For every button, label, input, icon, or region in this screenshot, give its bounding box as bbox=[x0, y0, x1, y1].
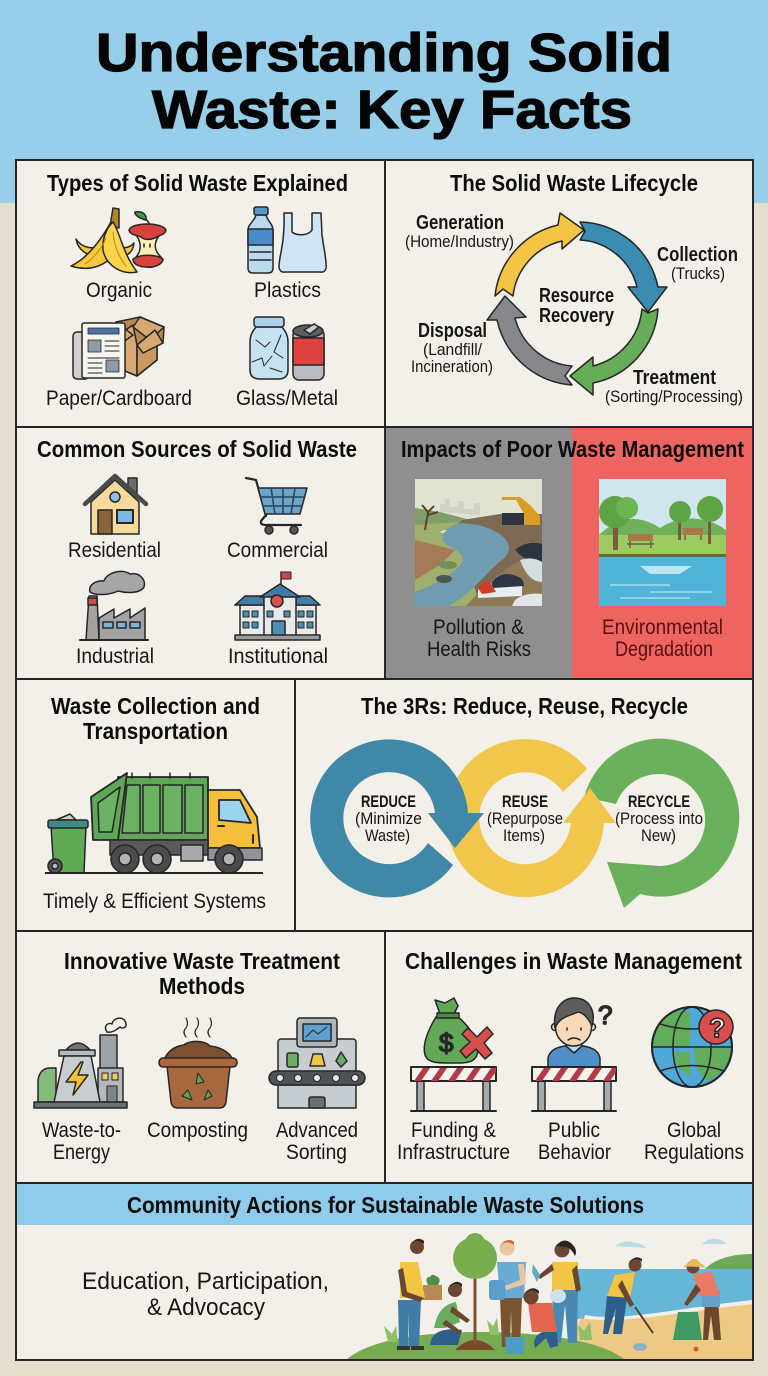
label: environmental degradation: Degradation bbox=[615, 638, 713, 661]
icon: confused person: ? bbox=[598, 1000, 612, 1030]
label: public behavior bbox=[538, 1119, 611, 1164]
heading: challenges: Challenges in Waste Management bbox=[405, 948, 742, 974]
icon: newspaper bbox=[73, 323, 125, 379]
illustration: clean park and lake bbox=[599, 479, 726, 606]
heading: collection bbox=[51, 693, 260, 744]
heading: collection: Transportation bbox=[83, 718, 228, 744]
arrow: disposal to generation bbox=[487, 296, 572, 385]
icon: confused person bbox=[548, 998, 612, 1067]
arrow: reduce ring bbox=[310, 739, 484, 897]
label: reduce: REDUCE bbox=[361, 793, 416, 811]
label: residential: Residential bbox=[68, 539, 161, 562]
text: education participation advocacy bbox=[82, 1268, 329, 1321]
heading: types: Types of Solid Waste Explained bbox=[47, 170, 348, 196]
label: collection: (Trucks) bbox=[671, 264, 725, 283]
label: pollution and health risks: Pollution & bbox=[433, 616, 524, 639]
label: advanced sorting: Sorting bbox=[286, 1141, 347, 1164]
label: disposal bbox=[411, 320, 493, 376]
panel: challenges bbox=[385, 931, 753, 1183]
label: advanced sorting bbox=[276, 1119, 358, 1164]
title: Waste: Key Facts bbox=[152, 80, 632, 140]
label: reuse: REUSE bbox=[502, 793, 548, 811]
label: recycle: (Process into bbox=[615, 809, 703, 828]
label: resource recovery: Resource bbox=[539, 285, 614, 307]
illustration: polluted river bbox=[415, 479, 542, 606]
label: environmental degradation: Environmental bbox=[602, 616, 723, 639]
label: organic: Organic bbox=[86, 279, 152, 302]
icon: money bag with cross bbox=[424, 998, 493, 1063]
label: treatment bbox=[605, 367, 743, 406]
label: plastics: Plastics bbox=[254, 279, 321, 302]
panel: innovative treatment bbox=[16, 931, 385, 1183]
label: global regulations: Regulations bbox=[644, 1141, 744, 1164]
background: sky band bbox=[0, 0, 768, 203]
label: paper/cardboard: Paper/Cardboard bbox=[46, 387, 192, 410]
icon: cardboard box bbox=[116, 317, 164, 376]
label: generation bbox=[405, 212, 514, 251]
label: collection: Collection bbox=[657, 244, 738, 266]
label: recycle: RECYCLE bbox=[628, 793, 690, 811]
label: generation: (Home/Industry) bbox=[405, 232, 514, 251]
icon: school building bbox=[235, 572, 320, 640]
label: waste to energy: Energy bbox=[53, 1141, 110, 1164]
label: waste to energy: Waste-to- bbox=[42, 1119, 121, 1142]
label: disposal: (Landfill/ bbox=[423, 340, 482, 359]
icon: garbage truck bbox=[91, 773, 262, 873]
icon: globe with question badge bbox=[652, 1007, 733, 1087]
icon: factory bbox=[80, 571, 148, 640]
arrow: reuse ring bbox=[446, 739, 616, 897]
label: global regulations: Global bbox=[667, 1119, 721, 1142]
label: pollution and health risks: Health Risks bbox=[427, 638, 531, 661]
label: reuse: Items) bbox=[503, 826, 545, 845]
heading: treatment methods: Innovative Waste Treatment bbox=[64, 948, 340, 974]
heading: lifecycle: The Solid Waste Lifecycle bbox=[450, 170, 698, 196]
arrow: recycle ring bbox=[584, 739, 739, 908]
label: composting: Composting bbox=[147, 1119, 248, 1142]
text: education participation advocacy: & Advocacy bbox=[147, 1294, 265, 1321]
arrow: treatment to disposal bbox=[570, 309, 658, 395]
heading: community actions: Community Actions for Sustainable Waste Solutions bbox=[127, 1192, 644, 1218]
label: funding and infrastructure: Infrastructure bbox=[397, 1141, 510, 1164]
title: Understanding Solid bbox=[96, 23, 672, 83]
icon: cracked glass jar bbox=[250, 317, 288, 379]
label: advanced sorting: Advanced bbox=[276, 1119, 358, 1142]
label: reduce bbox=[355, 793, 422, 845]
icon: shopping cart bbox=[246, 478, 307, 534]
panel: community actions bbox=[16, 1183, 753, 1360]
ground line bbox=[45, 872, 263, 874]
icon: wheelie bin bbox=[48, 814, 88, 873]
label: global regulations bbox=[644, 1119, 744, 1164]
label: recycle bbox=[615, 793, 703, 845]
title bbox=[96, 23, 672, 140]
heading: treatment methods: Methods bbox=[159, 973, 245, 999]
label: glass/metal: Glass/Metal bbox=[236, 387, 338, 410]
label: resource recovery: Recovery bbox=[539, 305, 615, 327]
icon: globe with question badge: ? bbox=[709, 1013, 726, 1043]
arrow: generation to collection bbox=[495, 213, 584, 296]
label: reduce: (Minimize bbox=[355, 809, 422, 828]
text: education participation advocacy: Education, Participation, bbox=[82, 1268, 329, 1295]
label: disposal: Incineration) bbox=[411, 357, 493, 376]
heading: sources: Common Sources of Solid Waste bbox=[37, 436, 357, 462]
label: environmental degradation bbox=[602, 616, 723, 661]
label: public behavior: Behavior bbox=[538, 1141, 611, 1164]
panel: lifecycle bbox=[385, 160, 753, 427]
icon: plastic bottle bbox=[248, 207, 273, 273]
icon: barrier two bbox=[532, 1067, 616, 1111]
label: timely and efficient: Timely & Efficient Systems bbox=[43, 890, 266, 913]
illustration: community cleanup bbox=[347, 1233, 752, 1359]
panel: types of solid waste bbox=[16, 160, 385, 427]
panel: common sources bbox=[16, 427, 385, 679]
label: collection bbox=[657, 244, 738, 283]
icon: barrier one bbox=[411, 1067, 496, 1111]
icon: banana peel bbox=[71, 208, 137, 273]
label: treatment: Treatment bbox=[633, 367, 716, 389]
heading: 3Rs: The 3Rs: Reduce, Reuse, Recycle bbox=[361, 693, 688, 719]
label: pollution and health risks bbox=[427, 616, 531, 661]
icon: money bag with cross: $ bbox=[439, 1028, 454, 1058]
label: reuse: (Repurpose bbox=[487, 809, 563, 828]
panel: impacts bbox=[385, 427, 753, 679]
label: reduce: Waste) bbox=[365, 826, 410, 845]
label: institutional: Institutional bbox=[228, 645, 328, 668]
icon: advanced sorting machine bbox=[269, 1018, 365, 1108]
label: funding and infrastructure bbox=[397, 1119, 510, 1164]
icon: metal can bbox=[293, 324, 324, 380]
label: commercial: Commercial bbox=[227, 539, 328, 562]
icon: house bbox=[85, 476, 146, 534]
label: funding and infrastructure: Funding & bbox=[411, 1119, 496, 1142]
icon: plastic bag bbox=[279, 213, 326, 272]
label: treatment: (Sorting/Processing) bbox=[605, 387, 743, 406]
label: generation: Generation bbox=[416, 212, 504, 234]
heading: collection: Waste Collection and bbox=[51, 693, 260, 719]
panel: 3Rs bbox=[295, 679, 753, 931]
label: waste to energy bbox=[42, 1119, 121, 1164]
icon: waste to energy plant bbox=[34, 1018, 127, 1108]
icon: apple core bbox=[129, 212, 166, 267]
icon: composting bin bbox=[159, 1018, 237, 1108]
heading: treatment methods bbox=[64, 948, 340, 999]
label: industrial: Industrial bbox=[76, 645, 154, 668]
label: public behavior: Public bbox=[548, 1119, 600, 1142]
label: disposal: Disposal bbox=[418, 320, 487, 342]
panel: collection and transportation bbox=[16, 679, 295, 931]
label: reuse bbox=[487, 793, 563, 845]
label: resource recovery bbox=[539, 285, 615, 327]
arrow: collection to treatment bbox=[580, 222, 667, 312]
label: recycle: New) bbox=[641, 826, 676, 845]
header band bbox=[17, 1184, 752, 1225]
